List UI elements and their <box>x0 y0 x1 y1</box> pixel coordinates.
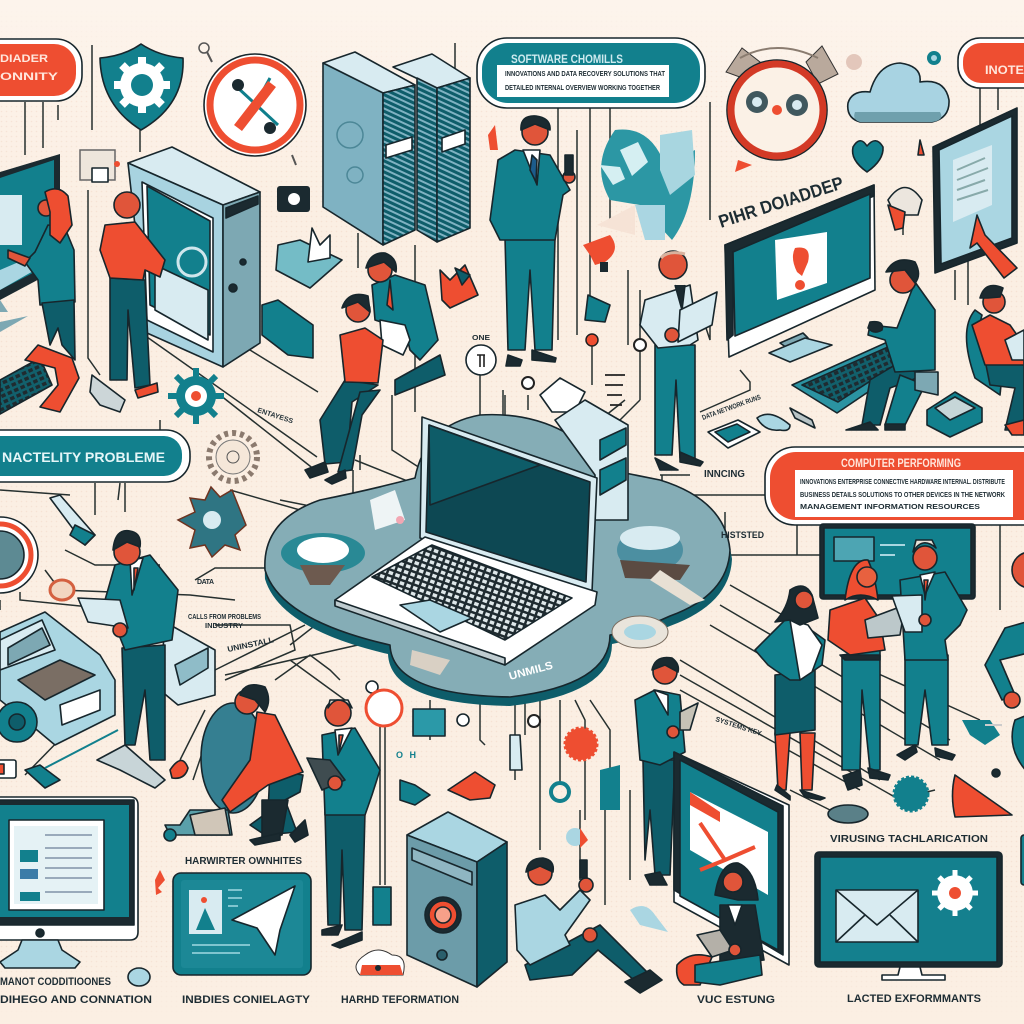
small teal glyph marks <box>155 750 416 895</box>
bottom right monitor with envelope <box>815 852 1002 980</box>
person: woman with red hair <box>8 189 75 360</box>
icon: prohibited tools sign <box>204 54 306 156</box>
tablet with paper plane <box>173 873 311 975</box>
scattered paper and mop under man <box>25 730 188 788</box>
badge: connectivity problems: NACTELITY PROBLEME <box>2 449 165 465</box>
left monitor <box>0 154 60 332</box>
person: woman sitting with tablet <box>677 863 764 985</box>
wall screen <box>820 524 975 599</box>
small camera icon <box>277 186 310 212</box>
label: missing: INNCING <box>704 469 745 480</box>
person: standing man with phone <box>490 116 575 366</box>
person: crouching man in red <box>201 685 308 845</box>
badge: top right red: INOTE <box>985 63 1024 77</box>
person: seated woman in red <box>305 294 383 484</box>
keyboard with red rest <box>0 345 125 414</box>
badge: top right red <box>958 38 1024 88</box>
bottom caption labels: DIHEGO AND CONNATION <box>0 994 152 1006</box>
circular gauge at left edge <box>0 517 38 593</box>
bottom caption labels: INBDIES CONIELAGTY <box>182 994 311 1006</box>
keyboard on desk <box>792 340 905 413</box>
icon: tool box <box>927 392 982 437</box>
badge: top left red <box>0 39 82 101</box>
heading: pihr doiaddep: PIHR DOIADDEP <box>716 173 846 232</box>
person: seated man with tablet <box>366 253 445 395</box>
red flame icon <box>488 125 615 272</box>
badge: performance red <box>765 447 1024 525</box>
person: woman in skirt <box>755 586 825 800</box>
small data labels: DATA <box>197 579 214 586</box>
person: older man with paper <box>892 540 967 760</box>
central cloud platform <box>265 415 732 706</box>
badge: software problems: INNOVATIONS AND DATA RECOVERY SOLUTIONS THAT <box>505 71 666 78</box>
small data labels: CALLS FROM PROBLEMS <box>188 614 261 621</box>
small cart <box>164 808 232 841</box>
grey mouse stone <box>828 805 868 823</box>
red capsule node <box>50 580 74 600</box>
center right monitor <box>725 185 875 362</box>
badge: top left red: ONNITY <box>0 71 59 83</box>
teal cartridge <box>262 300 313 358</box>
teal gear icon <box>168 368 224 424</box>
person: seated man with phone <box>515 858 662 993</box>
badge: performance red: MANAGEMENT INFORMATION RESOURCES <box>800 504 980 511</box>
icon: oval button <box>128 968 150 986</box>
peripherals: router and mouse <box>708 408 815 448</box>
open server cabinet <box>128 147 260 367</box>
person: man with laptop <box>78 531 178 760</box>
low server tower with red button <box>407 812 507 987</box>
icon: owl-faced gauge <box>726 46 838 172</box>
small data labels <box>188 530 764 738</box>
badge: performance red: COMPUTER PERFORMING <box>841 456 961 470</box>
red debris icon <box>440 265 478 308</box>
badge: software problems: DETAILED INTERNAL OVERVIEW WORKING TOGETHER <box>505 85 660 92</box>
label: hardware problems: HARWIRTER OWNHITES <box>185 856 302 867</box>
label: virus translation: VIRUSING TACHLARICATION <box>830 834 988 845</box>
small orbs <box>846 51 941 70</box>
small tag at left edge <box>0 760 16 778</box>
icon: heart <box>853 141 883 172</box>
bottom left monitor <box>0 797 138 968</box>
person: woman in red with tablet <box>828 560 905 790</box>
badge: software problems: SOFTWARE CHOMILLS <box>511 52 623 66</box>
small floating icons bottom center <box>528 715 668 932</box>
person at right edge <box>985 552 1024 775</box>
partial monitor at right edge <box>1021 835 1024 885</box>
small teal glyph marks: OH <box>396 750 416 760</box>
small pin icons <box>199 43 296 165</box>
large tilted screen with mail <box>674 752 789 965</box>
bottom caption labels: LACTED EXFORMMANTS <box>847 993 981 1005</box>
server towers <box>323 52 470 245</box>
badge: top left red: DIADER <box>0 53 48 65</box>
small data labels: UNINSTALL <box>227 635 275 654</box>
small plug icon <box>962 720 1002 745</box>
bottom caption labels <box>0 976 981 1006</box>
far right monitor <box>933 108 1017 278</box>
circle icon: switch <box>466 335 496 375</box>
router box <box>160 622 215 705</box>
globe with robot <box>597 129 695 240</box>
platform devices <box>281 490 705 683</box>
icon: teal spiked gear <box>178 487 246 557</box>
small data labels: SYSTEMS KEY <box>714 716 762 738</box>
icon: grey spiked gear <box>209 433 257 481</box>
person: white shirt man with laptop <box>640 251 717 470</box>
small data labels: INDUSTRY <box>205 623 243 630</box>
person: far right seated woman <box>966 286 1024 435</box>
person: man seated at keyboard <box>846 260 938 430</box>
circle icon: switch: ONE <box>472 335 490 342</box>
icon: red bulb <box>888 140 924 230</box>
small label: entries: ENTAYESS <box>256 407 294 425</box>
virus ball teal <box>894 777 928 811</box>
router on platform <box>540 378 628 520</box>
red cone icon <box>952 769 1012 817</box>
icon: security shield with gear <box>100 44 183 130</box>
small data labels: HISTSTED <box>721 530 764 540</box>
printer machine <box>0 612 115 745</box>
node icons below platform <box>366 681 522 925</box>
bottom caption labels: VUC ESTUNG <box>697 994 775 1006</box>
badge: connectivity problems <box>0 430 190 482</box>
person: man in red from behind <box>100 192 165 398</box>
label: network note: DATA NETWORK RUNS <box>701 394 762 422</box>
person: man with tablet near screen <box>635 658 698 885</box>
bottom caption labels: HARHD TEFORMATION <box>341 994 459 1006</box>
bottom caption labels: MANOT CODDITIOONES <box>0 976 111 988</box>
platform devices: UNMILS <box>508 660 554 683</box>
teal gem icon <box>585 295 610 322</box>
badge: software problems <box>477 38 705 108</box>
icon: padlock plug <box>80 150 120 182</box>
person: man with tablet <box>307 700 380 948</box>
pill tool <box>50 495 95 545</box>
central laptop <box>335 417 597 665</box>
icon: cloud <box>848 63 949 122</box>
icon: small red cloud <box>356 950 404 975</box>
open box icon <box>276 228 342 288</box>
node dots <box>522 334 646 405</box>
